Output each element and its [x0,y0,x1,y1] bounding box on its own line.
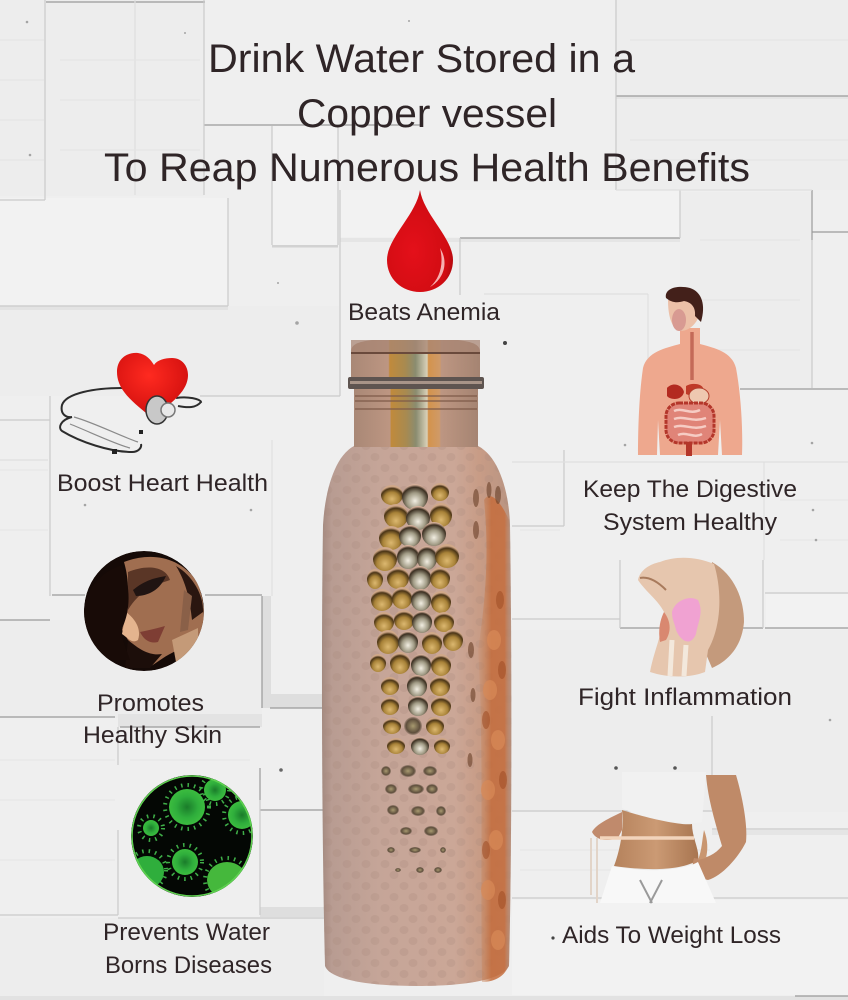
label: boost heart health: Boost Heart Health [57,470,268,497]
label: beats anemia: Beats Anemia [348,299,501,326]
bottle ring [348,377,484,389]
label: prevents water borne diseases [103,919,272,979]
label: promotes healthy skin [83,690,222,749]
title: Copper vessel [297,92,557,136]
icon: face portrait circle [83,551,204,671]
icon: knee inflammation [638,558,744,676]
bottle neck [354,388,478,447]
icon: woman measuring waist [591,772,746,903]
title: Drink Water Stored in a [208,37,636,81]
label: promotes healthy skin: Healthy Skin [83,722,222,749]
icon: virus circle [131,775,253,897]
label: keep the digestive system healthy: Keep The Digestive [583,476,797,503]
label: promotes healthy skin: Promotes [97,690,204,717]
label: keep the digestive system healthy [583,476,797,536]
title [104,37,750,190]
copper bottle [322,340,511,986]
label: aids to weight loss: Aids To Weight Loss [562,922,781,949]
bottle body [322,446,511,986]
copper streak on right [468,482,511,982]
hammered dimples [367,483,463,873]
icon: digestive system torso [638,287,742,456]
title: To Reap Numerous Health Benefits [104,146,750,190]
icon: heart with stethoscope [60,353,201,454]
label: prevents water borne diseases: Prevents Water [103,919,270,946]
icon: blood drop [387,190,453,292]
label: fight inflammation: Fight Inflammation [578,684,792,711]
label: keep the digestive system healthy: System Healthy [603,509,777,536]
bottle cap [351,340,480,377]
label: prevents water borne diseases: Borns Diseases [105,952,272,979]
